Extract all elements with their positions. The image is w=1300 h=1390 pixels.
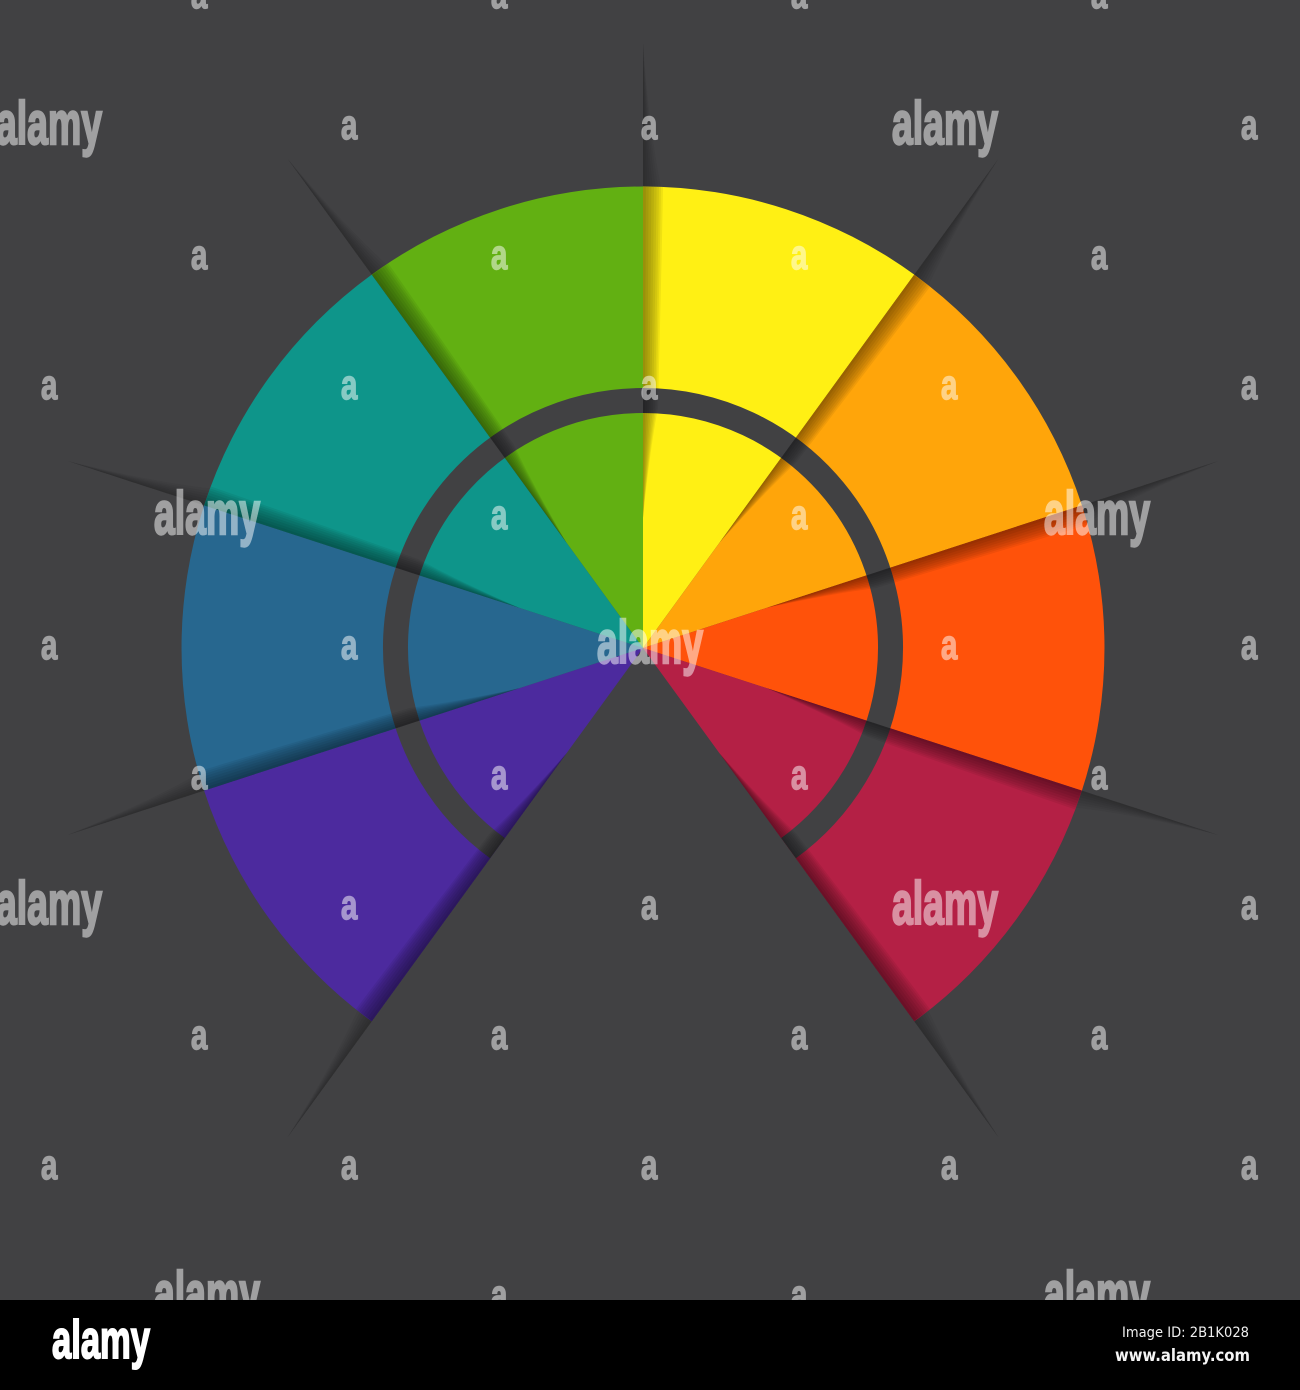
watermark: large logos: alamy xyxy=(892,870,998,937)
sector: blue xyxy=(182,505,643,791)
watermark: large logos: alamy xyxy=(154,480,260,547)
sector: crimson xyxy=(643,648,1082,1021)
watermark: small marks: aaaa xyxy=(191,231,1108,278)
website: www.alamy.com xyxy=(1115,1346,1250,1366)
watermark: small marks: aaaaa xyxy=(41,1141,1258,1188)
watermark: small marks: aaaaa xyxy=(41,361,1258,408)
watermark: large logos: alamy xyxy=(0,90,102,157)
shadows along sector edges xyxy=(61,43,1225,1137)
watermark: large logos: alamy xyxy=(0,870,102,937)
watermark: large logos: alamy xyxy=(154,1260,260,1327)
watermark: large logos xyxy=(0,90,1150,1327)
watermark: large logos: alamy xyxy=(1044,1260,1150,1327)
inner ring xyxy=(396,400,890,848)
footer logo: alamy xyxy=(52,1310,150,1370)
watermark: small marks: aaaa xyxy=(191,1011,1108,1058)
color wheel xyxy=(61,43,1225,1137)
sector: green xyxy=(372,186,643,648)
watermark: small marks: aaa xyxy=(341,101,1258,148)
watermark: small marks: aaaa xyxy=(41,621,1258,668)
watermark: small marks: aaaa xyxy=(191,751,1108,798)
sector: teal xyxy=(204,275,643,648)
watermark: small marks: aa xyxy=(491,1271,808,1318)
image id: Image ID: 2B1K028 xyxy=(1122,1325,1249,1341)
sector: purple xyxy=(204,648,643,1021)
watermark: large logos: alamy xyxy=(1044,480,1150,547)
sector: red orange xyxy=(643,505,1104,791)
footer bar xyxy=(0,1300,1300,1390)
watermark: small marks: aa xyxy=(491,491,808,538)
watermark: large logos: alamy xyxy=(892,90,998,157)
sector: orange xyxy=(643,275,1082,648)
sector: yellow xyxy=(643,186,914,648)
watermark: small marks: aaa xyxy=(341,881,1258,928)
watermark: large logos: alamy xyxy=(597,609,703,676)
